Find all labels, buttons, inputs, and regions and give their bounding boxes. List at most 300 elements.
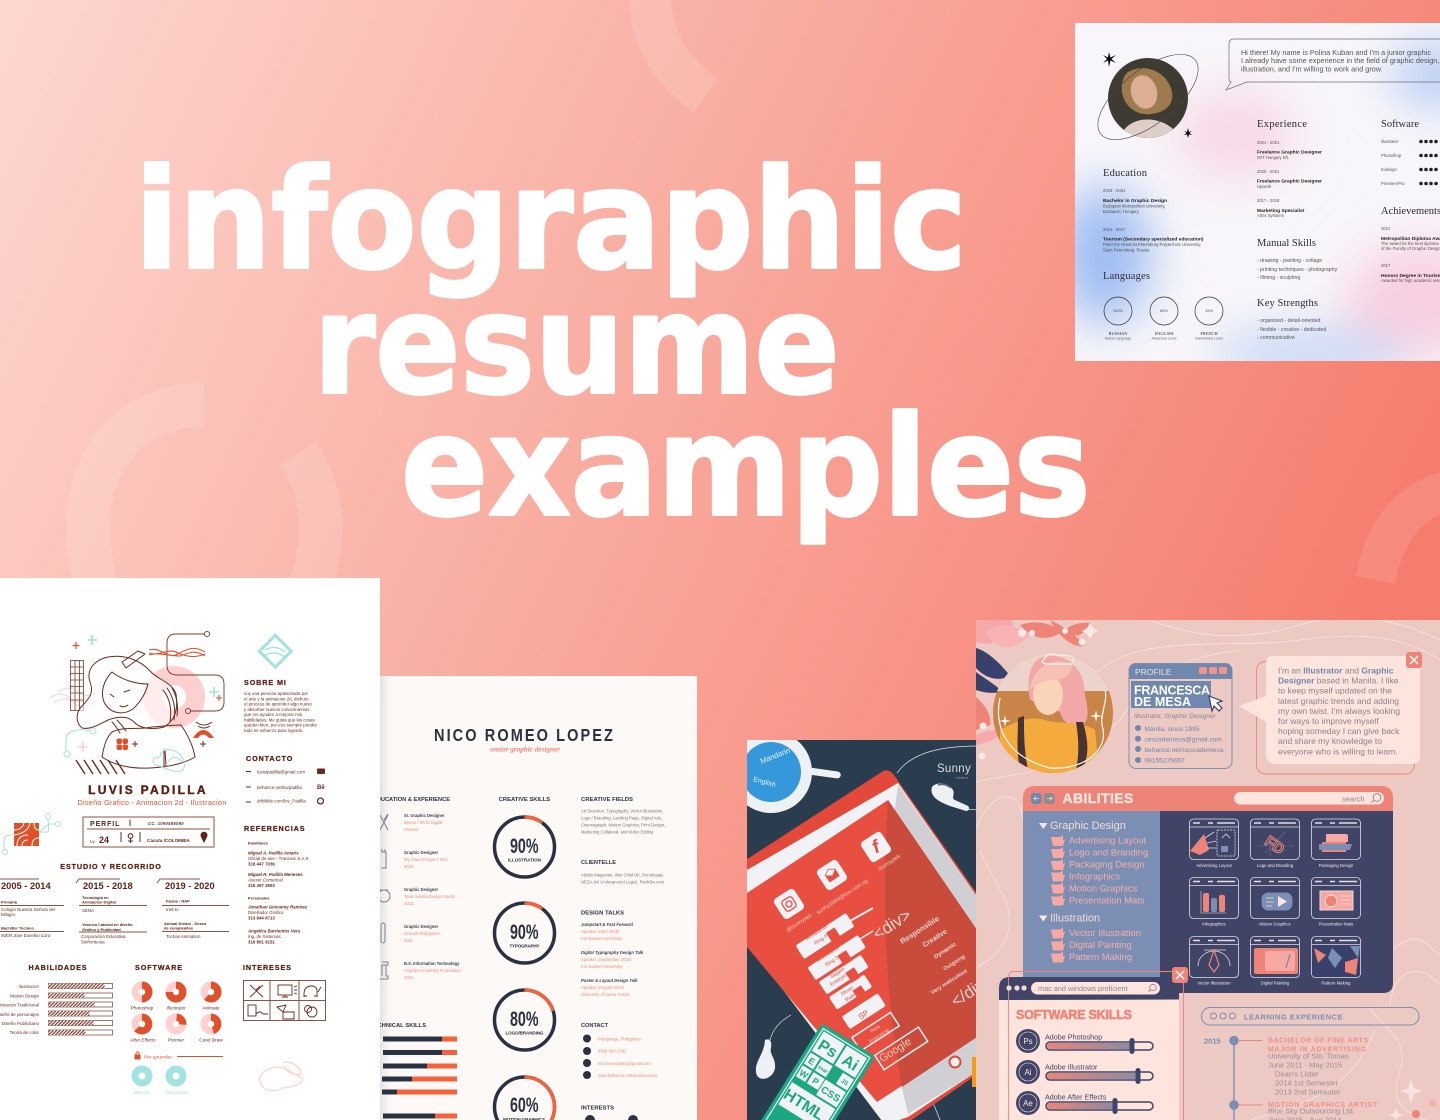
right column info: Art Direction, Typography, Vector Illustration, [581, 808, 663, 814]
icon: diamond logo [259, 635, 291, 667]
references: Ing. de Sistemas [248, 934, 282, 939]
software skills window [999, 967, 1188, 1120]
experience: Attrix Systems [1257, 213, 1284, 218]
div traits: </div> [947, 970, 997, 1011]
studies and career: Animacion Digital [82, 900, 116, 904]
languages: Advanced Level [1152, 336, 1177, 340]
learning experience: June 2011 - May 2015 [1268, 1060, 1342, 1070]
ability windows grid: Packaging Design [1319, 863, 1354, 868]
studies and career: Inef-Io [166, 907, 179, 912]
portrait photo [993, 653, 1113, 780]
studies and career: Grafico y Publicidad [82, 927, 121, 932]
right column info: CREATIVE FIELDS [581, 797, 633, 803]
education and experience: Beepo / MCM Digital [404, 820, 442, 825]
profile card: PROFILE [1135, 667, 1172, 677]
creative skills rings: ILLUSTRATION [508, 858, 542, 862]
experience: Freelance Graphic Designer [1257, 150, 1322, 156]
skill sliders: Adobe After Effects [1045, 1092, 1107, 1102]
references: Jonathan Giovanny Ramirez [248, 904, 308, 910]
achievements: of the Faculty of Graphic Design [1381, 246, 1440, 251]
right column info: Pampanga, Philippines [598, 1036, 641, 1042]
profile card: behance.net/cescademesa [1144, 747, 1224, 754]
right column info: CLIENTELLE [581, 860, 616, 866]
software [1381, 119, 1438, 186]
profile card: DE MESA [1134, 695, 1191, 709]
green skills card: PHP [816, 1065, 829, 1076]
studies and career: Milagro [1, 912, 16, 917]
studies and career: 2015 - 2018 [83, 881, 133, 891]
photo outline ring [998, 690, 1106, 768]
experience: 2020 - 2021 [1257, 169, 1280, 174]
panel: Nico Romeo Lopez resume [370, 676, 697, 1120]
software: Illustrator [1381, 139, 1399, 144]
ability windows grid: Presentation Mats [1319, 922, 1353, 926]
about me: queden bien, por eso siempre pondre [244, 722, 318, 728]
studies and career: Tochas Animation [166, 934, 201, 939]
speech bubble about: Designer based in Manila. I like [1278, 676, 1399, 686]
window icons [1190, 830, 1360, 977]
profile card: Illustrator, Graphic Designer [1134, 713, 1217, 720]
education: Peter the Great St.Petersburg Polytechnic University, [1103, 242, 1201, 247]
technical skills [380, 1023, 457, 1118]
panel: Sunny resume [747, 740, 976, 1120]
contact: CONTACTO [246, 754, 293, 763]
achievements: 2021 [1381, 226, 1391, 231]
panel: Luvis Padilla resume [0, 578, 380, 1120]
key strengths: - organized - detail-oriented [1257, 318, 1321, 324]
name: Diseño Grafico - Animacion 2d - Ilustracion [77, 798, 227, 807]
red wave [149, 648, 205, 657]
references: Personales [248, 896, 270, 900]
folder tree: Infographics [1069, 870, 1120, 882]
title: infographic [134, 140, 967, 300]
references: 316 801 9151 [248, 940, 275, 944]
education and experience: Zemark Philippines [404, 931, 440, 936]
work experience flasks: Woodlands [816, 945, 841, 963]
ability windows grid: Logo and Branding [1257, 863, 1294, 868]
education and experience: B.S. Information Technology [404, 961, 460, 966]
green skills card: JS [839, 1078, 849, 1087]
software donuts: Premier [168, 1038, 185, 1042]
manual skills: - filming - sculpting [1257, 275, 1300, 281]
social icons: f [870, 836, 883, 858]
about me: todo mi esfuerzo para lograrlo. [244, 728, 304, 733]
name [77, 783, 227, 807]
speech bubble about: everyone who is willing to learn. [1278, 746, 1398, 756]
achievements: 2017 [1381, 263, 1391, 268]
folder tree: Motion Graphics [1069, 882, 1138, 894]
work experience flasks: Reta [869, 1024, 882, 1035]
speech bubble about: latest graphic trends and adding [1278, 696, 1399, 706]
decorative blob [260, 1062, 303, 1091]
studies and career: Colegio Nuestra Señora del [1, 907, 55, 912]
learning experience: MOTION GRAPHICS ARTIST [1268, 1102, 1378, 1109]
green skills card: P [810, 1076, 821, 1087]
social icons: @sunnypek [786, 913, 814, 934]
profile box: CC. 1090586090 [148, 821, 184, 826]
software donuts: SOFTWARE [135, 963, 183, 972]
div traits: <div> [869, 905, 915, 944]
title [134, 140, 1090, 548]
tablet body [747, 770, 976, 1120]
folder tree: Presentation Mats [1069, 894, 1145, 906]
education: 2018 - 2021 [1103, 188, 1126, 193]
technical skills: TECHNICAL SKILLS [370, 1023, 426, 1029]
folder tree: Advertising Layout [1069, 834, 1147, 846]
learning experience: University of Sto. Tomas [1268, 1052, 1349, 1060]
references: 313 844 6713 [248, 916, 275, 920]
learning experience: 2015 [1204, 1036, 1221, 1046]
icon: coffee cup languages: English [752, 776, 776, 789]
software: PremierePro [1381, 181, 1405, 186]
ability windows grid: Infographics [1202, 922, 1226, 926]
speech bubble about: for ways to improve myself [1278, 716, 1379, 726]
education and experience: Sr. Graphic Designer [404, 813, 445, 818]
right column info: INTERESTS [581, 1106, 614, 1112]
creative skills rings: 60% [510, 1094, 539, 1117]
contact: luvisipadilla@gmail.com [257, 770, 305, 774]
achievements [1381, 206, 1440, 283]
speech bubble about: to keep myself updated on the [1278, 686, 1392, 696]
creative skills rings: 80% [510, 1008, 539, 1031]
work experience flasks: Ring Sec [824, 952, 845, 968]
icons [380, 814, 390, 980]
speech bubble: illustration, and I'm willing to work and grow. [1241, 64, 1383, 74]
title: resume [314, 266, 840, 426]
right column info: Digital Typography Design Talk [581, 950, 644, 955]
key strengths: - flexible - creative - dedicated [1257, 327, 1326, 333]
manual skills [1257, 238, 1338, 281]
social icons [772, 830, 902, 934]
icon: coffee cup languages: Mandarin [759, 746, 791, 766]
experience [1257, 119, 1322, 218]
languages: Languages [1103, 271, 1150, 282]
about me: SOBRE MI [244, 678, 287, 687]
education and experience: Angeles University Foundation [404, 968, 461, 973]
right column info: Far Eastern University [581, 936, 623, 941]
manual skills: - printing techniques - photography [1257, 267, 1338, 273]
languages: Elementary Level [1195, 336, 1223, 340]
education and experience: Graphic Designer [404, 924, 439, 929]
software donuts: Illustrator [166, 1006, 186, 1010]
speech bubble about: and share my knowledge to [1278, 736, 1382, 746]
interests: INTERESES [243, 963, 292, 972]
background swirl lines [976, 618, 1440, 1120]
experience: Upwork [1257, 184, 1272, 189]
references: Miguel A. Padilla Amaris [248, 850, 299, 856]
panel: Francesca de Mesa resume [976, 618, 1440, 1120]
name: senior graphic designer [489, 746, 560, 754]
contact: Bē [317, 785, 325, 791]
right column info: Jumpstart & Fast Forward [581, 922, 633, 927]
right column info: nicoromeolopez@gmail.com [598, 1061, 651, 1066]
skills bars [0, 963, 112, 1035]
experience: Freelance Graphic Designer [1257, 178, 1322, 184]
references: Familiares [248, 840, 269, 846]
education [1103, 168, 1204, 252]
education and experience: Graphic Designer [404, 850, 439, 855]
education and experience: Present [404, 827, 419, 832]
folder tree: Pattern Making [1069, 951, 1132, 962]
profile card: FRANCESCA [1134, 684, 1210, 698]
ability windows grid: Digital Painting [1261, 980, 1290, 986]
references: Asesor Comercial [247, 878, 284, 882]
name: LUVIS PADILLA [88, 783, 208, 797]
education: Budapest, Hungary [1103, 209, 1140, 214]
folder tree [1039, 820, 1148, 962]
work experience flasks [795, 908, 928, 1070]
about me: que me ayuden a mejorar mis [244, 712, 303, 717]
education and experience: Graphic Designer [404, 887, 439, 892]
work experience flasks: Woodlands [804, 924, 829, 942]
contact: behance.net/luvpadilla [257, 785, 302, 790]
about me [244, 678, 318, 733]
education and experience: 2011 [404, 938, 414, 943]
languages: ENGLISH [1155, 331, 1174, 336]
education and experience: 2015 [404, 864, 414, 869]
div traits: Very meticulous [930, 968, 969, 996]
green skills card: W [797, 1068, 810, 1081]
div traits: Responsible [898, 914, 941, 946]
profile box: PERFIL [90, 821, 120, 828]
decorative arcs [88, 0, 1440, 620]
ability windows grid: Vector Illustration [1198, 980, 1231, 986]
studies and career: ESTUDIO Y RECORRIDO [60, 862, 162, 871]
icon: red pattern tile [2, 814, 60, 854]
work experience flasks: Jaggee [829, 966, 846, 980]
green skills card: Ps [815, 1037, 840, 1062]
skill sliders: Adobe Illustrator [1045, 1062, 1098, 1072]
learning experience: MAJOR IN ADVERTISING [1268, 1046, 1367, 1054]
abilities window [1023, 786, 1393, 993]
right column info: Cinemagraph, Motion Graphics, Print Design, [581, 822, 665, 828]
profile card: 09155275657 [1144, 758, 1185, 764]
education: Bachelor in Graphic Design [1103, 198, 1167, 204]
references: Diseñador Grafico [248, 910, 284, 915]
languages: 100% [1113, 308, 1124, 313]
abilities window: ABILITIES [1062, 790, 1134, 806]
creative skills rings: LOGO/BRANDING [506, 1030, 544, 1036]
education and experience: 2013 [404, 901, 414, 906]
earphones and wire [756, 746, 978, 1120]
sparkles and dots [1389, 1079, 1436, 1120]
languages: 85% [1160, 308, 1168, 313]
education and experience: My Cloud People / TGA [404, 857, 448, 862]
speech bubble about [1239, 652, 1422, 774]
cyan wire [64, 728, 184, 772]
education and experience [373, 797, 461, 980]
education: Saint Petersburg, Russia [1103, 248, 1150, 252]
social icons: sunny1994@live.com.sg [816, 878, 869, 916]
studies and career: Fauna - NAP [166, 898, 190, 904]
work experience flasks: Mainn [844, 991, 859, 1003]
learning experience: 2013 2nd Semester [1275, 1088, 1341, 1096]
studies and career: Yoncico Laboral en diseño [82, 922, 133, 927]
studies and career: 2019 - 2020 [165, 881, 215, 891]
contact [246, 754, 325, 804]
key strengths [1257, 298, 1326, 341]
work experience flasks: Ring Pri [813, 932, 832, 947]
earphones and wire: intellect [956, 776, 968, 780]
illustration: girl portrait [50, 631, 224, 774]
education: Budapest Metropolitan University, [1103, 204, 1165, 208]
education and experience: 2010 [404, 975, 414, 980]
profile box: 24 [99, 835, 109, 845]
software: Indesign [1381, 167, 1398, 172]
studies and career [0, 862, 229, 944]
creative skills rings: 90% [510, 835, 539, 858]
green skills card [753, 1023, 875, 1120]
education: Tourism (Secondary specialized education) [1103, 236, 1204, 242]
ability windows grid [1190, 819, 1360, 986]
software donuts: Corel Draw [199, 1038, 223, 1042]
skills bars: Diseño Publicitario [2, 1021, 39, 1026]
green skills card: Ai [839, 1052, 861, 1075]
experience: 2021 - 2021 [1257, 140, 1280, 145]
to learn: Blender [134, 1090, 151, 1096]
folder tree: Logo and Branding [1069, 846, 1148, 858]
work experience flasks: Ntuan [840, 985, 855, 997]
right column info: 0999-993-2382 [598, 1048, 627, 1054]
references: Oficial de aire - Transivic S.A.S [248, 856, 309, 861]
right column info: Adobo Magazine, War Child UK, Penshoppe [581, 872, 664, 878]
creative skills rings: 90% [510, 921, 539, 944]
abilities window: search [1342, 794, 1365, 804]
right column info: NEDA (w/ Underground Logic), Rock3rs.com [581, 880, 665, 884]
languages: Native Language [1105, 336, 1131, 340]
div traits: Outgoing [943, 954, 966, 972]
right column info: Logo / Branding, Landing Page, Digital Ads, [581, 816, 662, 820]
creative skills rings [494, 797, 555, 1120]
software donuts: Animate [202, 1006, 220, 1010]
skills bars: Ilustracion [18, 984, 39, 989]
to learn: Toon boom [165, 1090, 189, 1096]
languages [1103, 271, 1223, 340]
studies and career: Animal Dream - Deseo [164, 921, 207, 926]
name: NICO ROMEO LOPEZ [434, 725, 615, 745]
learning experience: Dean's Lister [1275, 1070, 1319, 1078]
folder tree: Packaging Design [1069, 858, 1145, 870]
right column info: Far Eastern University [581, 964, 623, 969]
ability windows grid: Pattern Making [1322, 980, 1351, 986]
about me: el arte y la animacion 2d, disfruto [244, 696, 309, 701]
skill sliders [1016, 1029, 1153, 1115]
window icons: FD [1261, 833, 1288, 858]
ability windows grid: Advertising Layout [1196, 863, 1232, 868]
software skills window: mac and windows proficient [1038, 984, 1128, 993]
speech bubble [1226, 39, 1440, 90]
profile card: Manila, since 1995 [1144, 726, 1200, 733]
right column info: Speaker (April 2018) [581, 929, 620, 934]
languages: RUSSIAN [1109, 331, 1128, 336]
title: examples [401, 387, 1090, 548]
right column info: Speaker (August 2014) [581, 985, 625, 990]
icon: coffee cup languages [747, 740, 841, 813]
social icons: /sunnypek [877, 854, 902, 873]
name [434, 729, 612, 753]
div traits [874, 912, 976, 1004]
skills bars: Motion Design [10, 994, 39, 998]
skill sliders: Ps [1023, 1037, 1033, 1046]
work experience flasks: Enterprise [868, 1027, 891, 1045]
studies and career: 2005 - 2014 [1, 881, 51, 891]
references: Miguel R. Padilla Meneses [248, 872, 303, 877]
learning experience: LEARNING EXPERIENCE [1244, 1012, 1343, 1022]
skills bars: Teoria de color [9, 1030, 39, 1035]
right column info: Poster & Layout Design Talk [581, 978, 638, 983]
references [244, 824, 309, 944]
references: 316 497 3953 [248, 883, 275, 888]
speech bubble about: hoping someday I can give back [1278, 726, 1400, 736]
speech bubble about: I'm an Illustrator and Graphic [1278, 666, 1394, 676]
software donuts [129, 963, 223, 1042]
folder tree: Vector Illustration [1069, 927, 1141, 938]
speech bubble: I already have some experience in the field of graphic design, [1241, 56, 1439, 65]
portrait photo [1108, 58, 1188, 140]
ability windows grid: Motion Graphics [1259, 922, 1291, 926]
references: Angelica Barrientos Vera [247, 928, 301, 934]
learning experience: BACHELOR OF FINE ARTS [1268, 1038, 1368, 1044]
learning experience [1202, 1008, 1419, 1120]
studies and career: Corporacion Educativa [81, 934, 126, 939]
profile box: Cácuta /COLOMBIA [147, 838, 191, 843]
education: Education [1103, 168, 1148, 179]
software: Software [1381, 119, 1419, 130]
studies and career: Tecnologia en [82, 895, 109, 900]
manual skills: - drawing - painting - collage [1257, 258, 1322, 264]
panel: Polina Kuban resume [1060, 23, 1440, 380]
right column info: DESIGN TALKS [581, 910, 624, 916]
folder tree: Graphic Design [1050, 820, 1126, 832]
learning experience: 2014 1st Semester [1275, 1078, 1338, 1088]
experience: Experience [1257, 119, 1307, 130]
work experience flasks: SP [857, 1008, 871, 1022]
contact: dribbble.com/luv_Padilla [257, 798, 306, 804]
profile card: cescademesa@gmail.com [1144, 736, 1222, 744]
green skills card: E [806, 1055, 817, 1067]
studies and career: INEM Jose Eusebio Caro [1, 933, 51, 938]
skill sliders: Ae [1023, 1099, 1033, 1108]
orbit and stars [1098, 52, 1198, 140]
right column info: Marketing Collateral, and Video Editing [581, 830, 654, 834]
studies and career: Bachiller Tecnico [1, 926, 34, 930]
profile box [83, 817, 214, 847]
software donuts: After Effects [129, 1038, 156, 1042]
studies and career: de cumpleaños [164, 926, 194, 930]
about me: habilidades. Me gusta que las cosas [244, 717, 316, 722]
right column info: www.behance.net/nicoloserrano [598, 1073, 658, 1078]
key strengths: Key Strengths [1257, 298, 1318, 309]
learning experience: Blue Sky Outsourcing Ltd. [1268, 1106, 1355, 1116]
references: 318 447 7036 [248, 862, 275, 866]
about me: y absorber nuevos conocimientos [244, 707, 310, 712]
about me: soy una persona apasionada por [244, 691, 308, 696]
key strengths: - communicative [1257, 335, 1295, 341]
education: 2014 - 2017 [1103, 227, 1126, 232]
skill sliders: Ai [1024, 1068, 1032, 1077]
experience: ISIT Hungary Kft. [1257, 155, 1289, 160]
studies and career: Sinfronteras [81, 940, 105, 944]
gradient blobs [1060, 45, 1440, 380]
experience: 2017 - 2018 [1257, 198, 1280, 203]
work experience flasks: Google [877, 1036, 914, 1065]
green skills card: CSS [819, 1085, 842, 1105]
manual skills: Manual Skills [1257, 238, 1316, 249]
div traits: Dynamic [933, 941, 958, 960]
right column info: Speaker (September 2016) [581, 957, 632, 962]
about me: el proceso de aprender algo nuevo [244, 702, 312, 706]
software: Photoshop [1381, 153, 1402, 158]
